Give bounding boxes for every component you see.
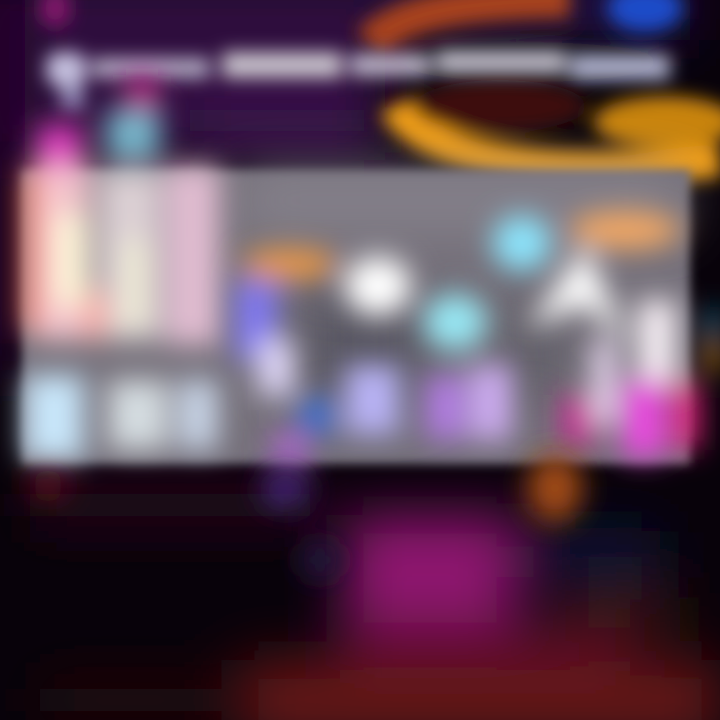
orange ring (395, 80, 720, 168)
left column group (22, 78, 220, 460)
lower stage figures (26, 454, 583, 578)
middle figures (235, 249, 512, 468)
screen shading (240, 178, 680, 410)
screen panel (22, 170, 690, 464)
background: upper wall (0, 0, 690, 370)
background: lower floor (30, 485, 720, 720)
top lights (39, 0, 683, 82)
right figures (492, 211, 720, 458)
title band (46, 50, 670, 110)
